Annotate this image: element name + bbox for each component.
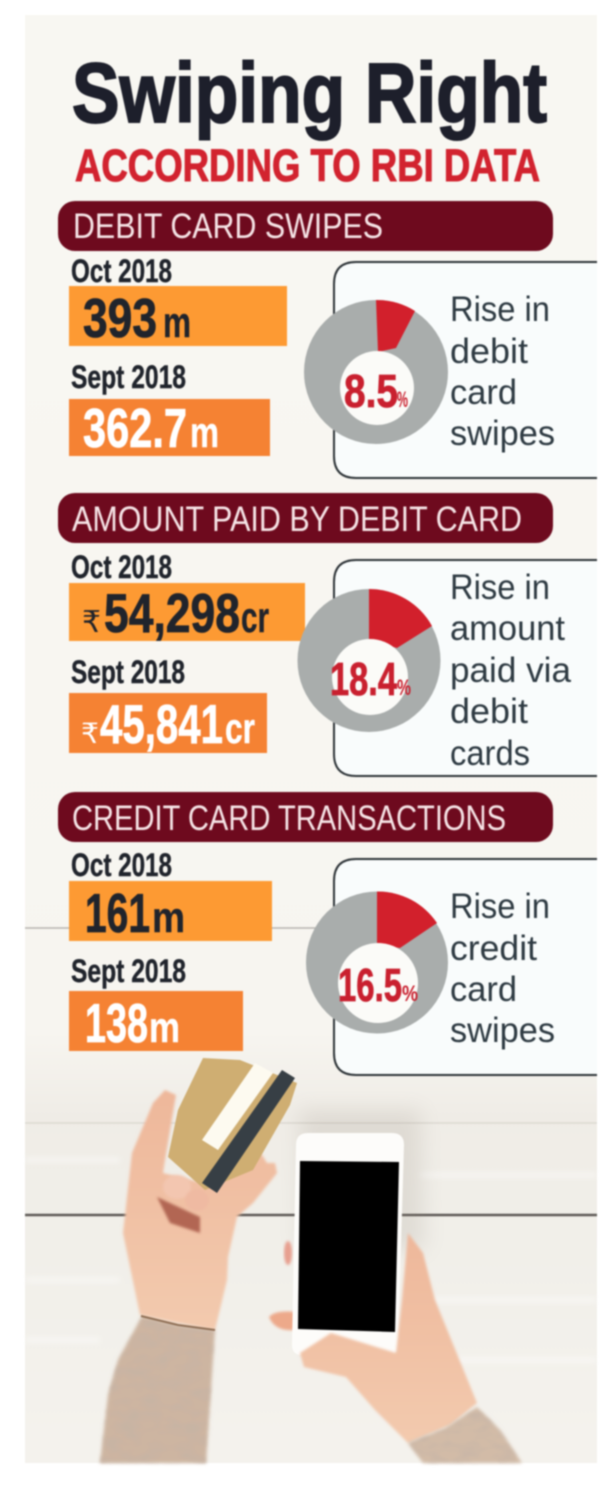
- bar: September: [69, 991, 243, 1054]
- bar: October: 393: [83, 287, 157, 349]
- donut caption: debit: [450, 332, 528, 371]
- bank card: [168, 1058, 297, 1193]
- date label: Sept 2018: [71, 953, 186, 989]
- section header: DEBIT CARD SWIPES: [73, 207, 383, 246]
- donut chart: 16.5%: [306, 891, 448, 1034]
- bar: October: ₹: [82, 606, 101, 639]
- bar: September: cr: [225, 705, 255, 753]
- bar: October: m: [163, 299, 191, 347]
- donut chart: 8.5%: 8.5: [344, 365, 398, 417]
- donut caption: amount: [450, 609, 565, 648]
- donut chart: 18.4%: [298, 589, 440, 732]
- callout box: [334, 262, 597, 478]
- section header: [58, 201, 553, 251]
- illustration: hands holding bank card and smartphone: [100, 1058, 522, 1463]
- bar: September: 362.7: [83, 397, 187, 459]
- panel: amount paid by debit card: [58, 493, 597, 776]
- left hand: [123, 1090, 277, 1330]
- bar: October: [69, 286, 287, 349]
- donut caption: debit: [450, 692, 528, 731]
- donut caption: [450, 887, 555, 1050]
- date label: Sept 2018: [71, 654, 185, 690]
- donut caption: credit: [450, 929, 537, 968]
- bar: October: m: [152, 894, 185, 942]
- left hand fingers: [157, 1175, 209, 1233]
- right hand: [300, 1233, 477, 1443]
- left hand sleeve: [100, 1316, 215, 1463]
- donut caption: cards: [450, 734, 530, 773]
- donut caption: paid via: [450, 651, 572, 690]
- donut caption: card: [450, 970, 517, 1009]
- left fingertip behind phone: [284, 1241, 292, 1265]
- sweater cuff line: [141, 1316, 215, 1330]
- date label: Oct 2018: [71, 253, 172, 289]
- donut caption: Rise in: [450, 568, 550, 607]
- donut chart: 18.4%: %: [397, 675, 411, 700]
- soft shadows on the table: [300, 1110, 425, 1250]
- bar: September: 45,841: [100, 693, 223, 755]
- panel: credit card transactions: [58, 792, 597, 1075]
- bar: October: 54,298: [104, 582, 240, 644]
- donut caption: Rise in: [450, 887, 550, 926]
- right hand sleeve: [408, 1407, 522, 1463]
- donut chart: 8.5%: %: [397, 387, 408, 412]
- donut caption: swipes: [450, 414, 555, 453]
- section header: CREDIT CARD TRANSACTIONS: [72, 799, 506, 838]
- date label: Oct 2018: [71, 549, 172, 585]
- donut caption: card: [450, 373, 517, 412]
- bar: September: 138: [85, 992, 148, 1054]
- bar: September: m: [149, 1004, 180, 1052]
- bar: September: [69, 397, 270, 459]
- smartphone: [292, 1133, 404, 1355]
- bar: October: [69, 881, 272, 944]
- donut caption: [450, 568, 572, 773]
- donut chart: 16.5%: 16.5: [338, 959, 402, 1011]
- bar: September: m: [190, 409, 219, 457]
- bar: September: ₹: [81, 718, 99, 749]
- donut caption: Rise in: [450, 290, 550, 329]
- donut chart: 8.5%: [304, 300, 448, 444]
- callout box: [334, 560, 597, 776]
- panel: debit card swipes: [58, 201, 597, 478]
- date label: Sept 2018: [71, 359, 186, 395]
- date label: Oct 2018: [71, 847, 172, 883]
- bar: October: 161: [85, 882, 150, 944]
- right fingertip behind phone: [269, 1312, 296, 1330]
- callout box: [334, 859, 597, 1075]
- section header: AMOUNT PAID BY DEBIT CARD: [72, 500, 522, 539]
- donut chart: 16.5%: %: [402, 981, 418, 1006]
- donut caption: swipes: [450, 1011, 555, 1050]
- donut chart: 18.4%: 18.4: [330, 653, 397, 705]
- bar: October: cr: [241, 594, 269, 642]
- donut caption: [450, 290, 555, 453]
